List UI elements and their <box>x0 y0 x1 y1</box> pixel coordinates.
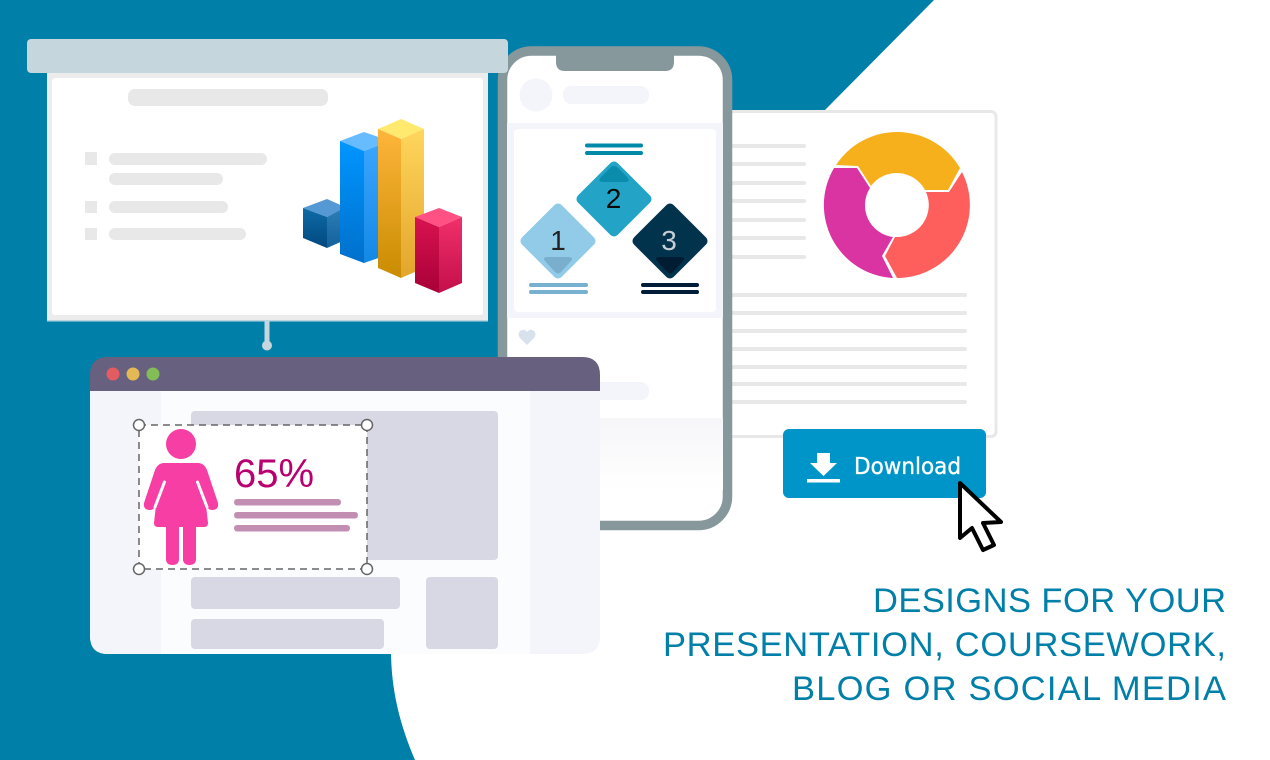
background: white diagonal area <box>391 0 1270 760</box>
tagline heading: PRESENTATION, COURSEWORK, <box>663 626 1226 664</box>
document text lines below chart <box>720 295 965 402</box>
username pill <box>563 86 649 104</box>
lines under diamond 3 <box>643 285 697 292</box>
projector screen surface <box>52 78 483 315</box>
icon: heart <box>518 330 536 345</box>
diagram heading lines <box>587 146 641 153</box>
icon: woman <box>144 429 218 565</box>
screen stand <box>262 321 272 350</box>
button: download <box>783 429 986 498</box>
donut chart <box>824 132 970 278</box>
slide title pill <box>128 89 328 106</box>
post band <box>507 123 723 318</box>
phone lower fade <box>507 418 723 490</box>
placeholder blocks <box>191 411 498 649</box>
tagline heading <box>663 582 1226 708</box>
post card <box>514 129 716 312</box>
phone notch <box>556 50 674 71</box>
panel: presentation board <box>27 39 508 350</box>
selected element <box>134 420 372 574</box>
projector screen frame <box>47 72 488 321</box>
document text lines beside chart <box>720 146 804 257</box>
diamond 1 <box>518 201 598 281</box>
button label: Download <box>854 454 961 480</box>
bullet text lines <box>109 153 267 240</box>
diamond 2 <box>574 159 654 239</box>
tagline heading: DESIGNS FOR YOUR <box>873 582 1226 620</box>
screen top bar <box>27 39 508 73</box>
diamond 1: 1 <box>550 225 566 256</box>
icon: download arrow <box>807 453 840 482</box>
diamond 3: 3 <box>661 225 677 256</box>
bullet squares <box>85 152 97 240</box>
lines under diamond 1 <box>531 285 586 292</box>
avatar <box>520 78 552 112</box>
panel: document <box>700 112 996 436</box>
selection handles <box>134 420 372 574</box>
stat text lines <box>234 499 358 532</box>
tagline heading: BLOG OR SOCIAL MEDIA <box>792 670 1226 708</box>
diamond 3 <box>630 201 710 281</box>
browser title bar <box>90 357 600 391</box>
3D bar chart <box>303 119 462 293</box>
panel: browser window <box>90 357 600 654</box>
left sidebar <box>90 391 161 654</box>
figure: 65%: 65% <box>234 452 314 496</box>
diamond 2: 2 <box>606 183 621 214</box>
icon: cursor arrow <box>960 483 1001 550</box>
window buttons <box>106 368 160 380</box>
right sidebar <box>530 391 600 654</box>
panel: phone <box>502 50 728 526</box>
caption pill <box>560 382 649 400</box>
